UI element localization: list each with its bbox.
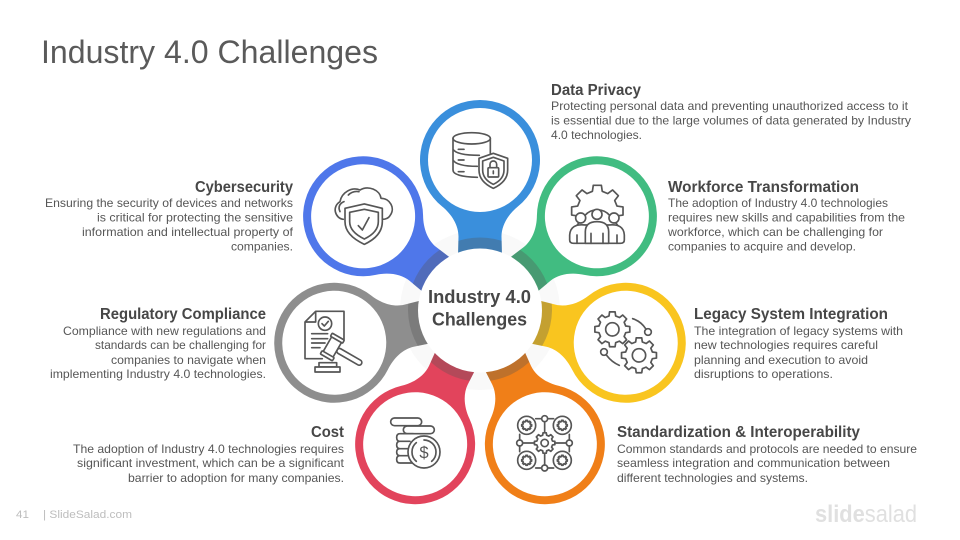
footer page number and site: 41	[16, 509, 29, 521]
text block: standardization and interoperability: Common standards and protocols are needed to ensure	[617, 442, 917, 456]
text block: workforce transformation: Workforce Transformation	[668, 179, 859, 196]
text block: cybersecurity	[45, 179, 294, 254]
text block: standardization and interoperability	[617, 424, 917, 485]
footer logo: slidesalad	[815, 501, 917, 528]
icon: gear with team	[570, 185, 624, 243]
text block: cost: barrier to adoption for many companies.	[128, 471, 344, 485]
center hub	[418, 248, 542, 372]
text block: cybersecurity: Ensuring the security of devices and networks	[45, 196, 293, 210]
text block: data privacy: Data Privacy	[551, 82, 641, 99]
text block: data privacy: Protecting personal data and preventing unauthorized access to it	[551, 99, 909, 113]
petal: legacy system integration	[532, 282, 686, 403]
text block: regulatory compliance: Regulatory Compliance	[100, 306, 266, 323]
text block: cost: Cost	[311, 424, 345, 441]
text block: legacy system integration: planning and execution to avoid	[694, 353, 868, 367]
icon: interlocking gears	[595, 312, 656, 373]
petal: regulatory compliance	[274, 282, 428, 403]
text block: workforce transformation: companies to acquire and develop.	[668, 240, 856, 254]
text block: regulatory compliance: implementing Industry 4.0 technologies.	[50, 367, 266, 381]
text block: legacy system integration	[694, 306, 903, 381]
text block: standardization and interoperability: seamless integration and communication between	[617, 456, 890, 470]
text block: cybersecurity: is critical for protecting the sensitive	[97, 210, 293, 224]
faint ring behind hub	[400, 230, 560, 390]
text block: cybersecurity: Cybersecurity	[195, 179, 293, 196]
petal: cost	[355, 352, 476, 504]
center hub: Challenges	[432, 310, 527, 330]
center hub: Industry 4.0	[428, 287, 531, 307]
text block: cybersecurity: information and intellectual property of	[82, 225, 294, 239]
icon: document with gavel	[305, 311, 367, 374]
text block: regulatory compliance: standards can be challenging for	[95, 338, 266, 352]
text block: workforce transformation: requires new skills and capabilities from the	[668, 210, 905, 224]
footer page number and site: | SlideSalad.com	[43, 509, 132, 521]
text block: legacy system integration: new technologies requires careful	[694, 338, 878, 352]
petal: data privacy	[420, 100, 540, 258]
text block: data privacy	[551, 82, 911, 142]
icon: coins with dollar: $	[419, 443, 429, 462]
text block: legacy system integration: Legacy System Integration	[694, 306, 888, 323]
text block: standardization and interoperability: Standardization & Interoperability	[617, 424, 860, 441]
text block: standardization and interoperability: different technologies and systems.	[617, 471, 808, 485]
petal: cybersecurity	[303, 156, 449, 291]
text block: workforce transformation: workforce, which can be challenging for	[667, 225, 883, 239]
text block: legacy system integration: disruptions to operations.	[694, 367, 833, 381]
text block: workforce transformation	[667, 179, 905, 254]
text block: regulatory compliance: Compliance with new regulations and	[63, 324, 266, 338]
text block: data privacy: 4.0 technologies.	[551, 128, 642, 142]
title: Industry 4.0 Challenges	[41, 34, 378, 70]
icon: coins with dollar	[391, 418, 440, 468]
text block: legacy system integration: The integration of legacy systems with	[694, 324, 903, 338]
text block: regulatory compliance: companies to navigate when	[111, 353, 266, 367]
petal: workforce transformation	[511, 156, 657, 291]
text block: cybersecurity: companies.	[231, 240, 293, 254]
icon: connected gears network	[517, 416, 572, 471]
icon: database with lock	[453, 133, 508, 188]
text block: data privacy: is essential due to the large volumes of data generated by Industry	[551, 114, 911, 128]
text block: cost: significant investment, which can be a significant	[77, 456, 345, 470]
text block: cost	[73, 424, 345, 485]
petal: standardization	[484, 352, 605, 504]
text block: regulatory compliance	[50, 306, 266, 381]
text block: cost: The adoption of Industry 4.0 technologies requires	[73, 442, 344, 456]
text block: workforce transformation: The adoption of Industry 4.0 technologies	[668, 196, 888, 210]
icon: cloud shield	[335, 188, 392, 244]
